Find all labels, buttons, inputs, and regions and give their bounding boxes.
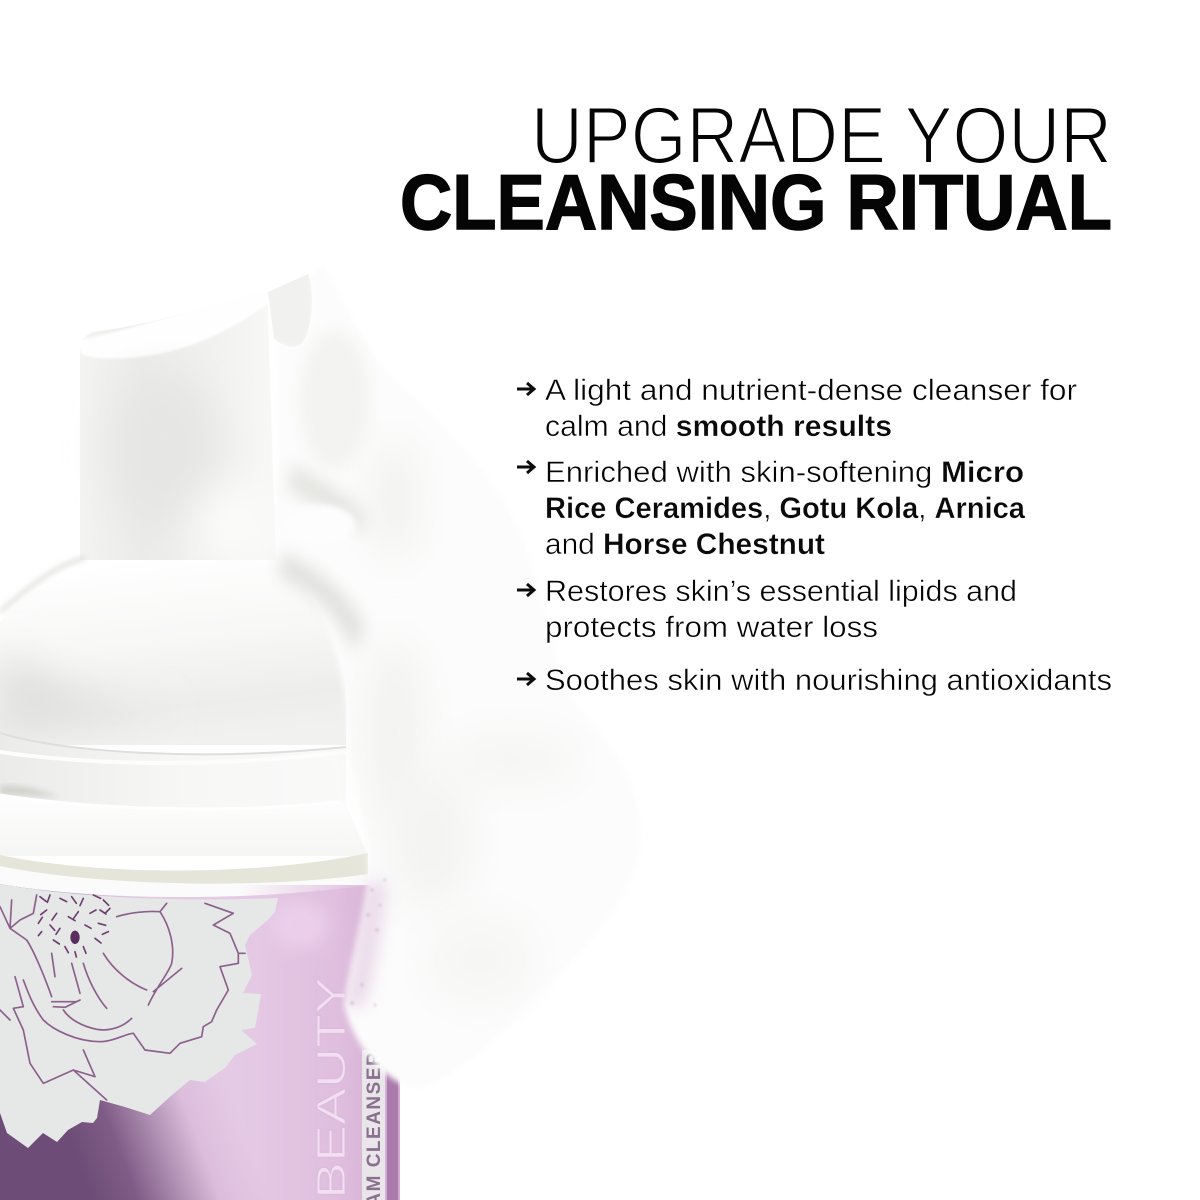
bullet 1: calm and smooth results <box>545 410 892 443</box>
collar ring <box>0 733 346 810</box>
bullet 4: Soothes skin with nourishing antioxidants <box>545 664 1112 697</box>
bullet 2: Rice Ceramides, Gotu Kola, Arnica <box>545 492 1026 525</box>
bullet 2 <box>517 456 1026 561</box>
bullet 1 <box>517 374 1077 443</box>
bullet 3: protects from water loss <box>545 611 878 644</box>
bottle body <box>0 880 400 1200</box>
bullet 2: Enriched with skin-softening Micro <box>545 456 1024 489</box>
bullet list <box>517 374 1112 697</box>
bullet 2: and Horse Chestnut <box>545 528 825 561</box>
bottle shoulder <box>0 795 368 899</box>
dome cap <box>0 558 346 745</box>
side label strip <box>362 1050 398 1200</box>
floral label artwork <box>0 884 278 1148</box>
bullet 3 <box>517 575 1017 644</box>
bullet 1: A light and nutrient-dense cleanser for <box>545 374 1077 407</box>
product photo: foam cleanser bottle with foam <box>0 264 641 1200</box>
brand wordmark: BEAUTY: BEAUTY <box>308 977 354 1199</box>
title <box>400 91 1112 246</box>
foam <box>276 264 641 1088</box>
title: CLEANSING RITUAL <box>400 158 1112 246</box>
title: UPGRADE YOUR <box>531 91 1112 181</box>
bullet 3: Restores skin’s essential lipids and <box>545 575 1017 608</box>
pump nozzle <box>80 274 312 565</box>
